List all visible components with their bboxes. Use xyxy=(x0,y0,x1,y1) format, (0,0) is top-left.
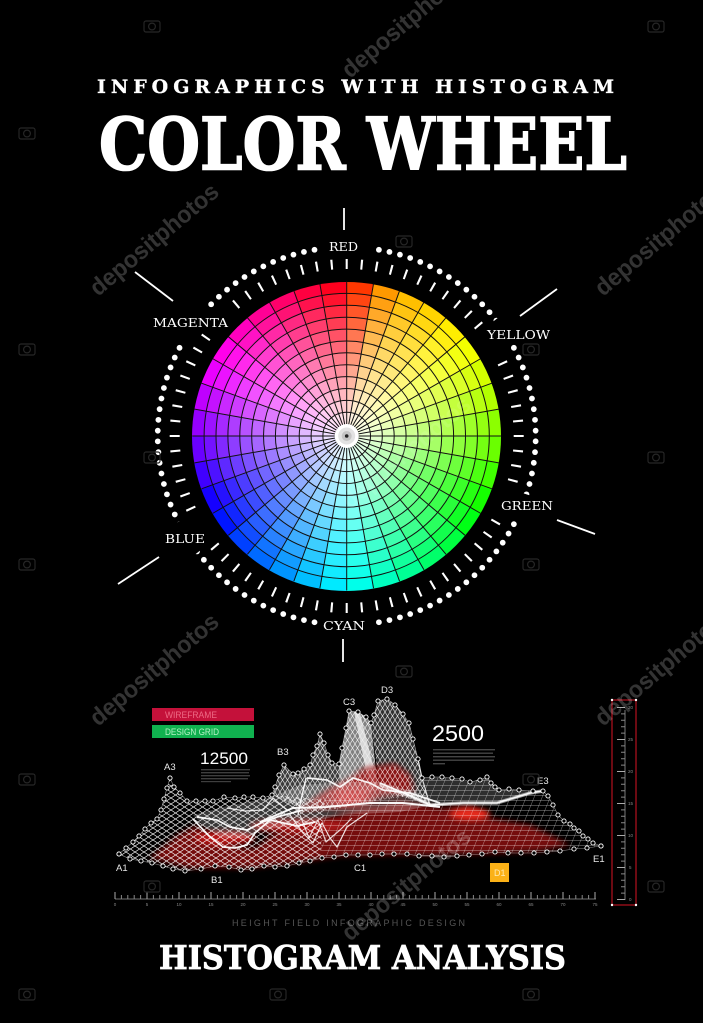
vertical scale: 30 xyxy=(628,705,634,710)
horizontal scale: 45 xyxy=(400,902,406,907)
vertical scale: 5 xyxy=(629,865,632,870)
point labels: D3 xyxy=(381,685,393,696)
color wheel fill xyxy=(192,282,501,590)
D1 marker: D1 xyxy=(494,868,506,878)
horizontal scale: 55 xyxy=(464,902,470,907)
horizontal scale: 65 xyxy=(528,902,534,907)
peak D3 xyxy=(371,699,430,805)
point labels: E1 xyxy=(593,854,605,865)
peak C3 xyxy=(339,711,378,800)
point labels: C3 xyxy=(343,697,355,708)
horizontal scale: 0 xyxy=(114,902,117,907)
vertical scale: 20 xyxy=(628,769,634,774)
D1 marker xyxy=(490,863,509,882)
watermark text: depositphotos xyxy=(85,178,224,302)
point labels: B3 xyxy=(277,747,289,758)
caption: HEIGHT FIELD INFOGRAPHIC DESIGN xyxy=(232,918,465,928)
horizontal scale: 70 xyxy=(560,902,566,907)
tick ring xyxy=(175,264,519,608)
stat 12500: 12500 xyxy=(200,749,248,768)
point labels: C1 xyxy=(354,863,366,874)
outline nodes front edge xyxy=(119,846,601,871)
vertical scale: 25 xyxy=(628,737,634,742)
dotted ring xyxy=(158,247,536,625)
wheel colour labels: RED xyxy=(329,239,358,254)
point labels: E3 xyxy=(537,776,549,787)
white ridge lines xyxy=(193,759,543,848)
wheel grid lines xyxy=(192,282,501,590)
vertical scale: 15 xyxy=(628,801,634,806)
wheel colour labels: BLUE xyxy=(165,531,205,546)
wheel colour labels xyxy=(153,239,553,633)
outline nodes back edge xyxy=(119,699,601,854)
vertical scale xyxy=(611,699,637,906)
stat 2500: 2500 xyxy=(432,721,484,746)
pale mesh band behind the ridges xyxy=(193,782,432,838)
stat 2500 xyxy=(432,721,495,764)
left floor mesh xyxy=(119,778,325,871)
watermark text: depositphotos xyxy=(337,391,476,515)
right floor mesh xyxy=(320,777,601,858)
legend: DESIGN GRID xyxy=(165,727,219,737)
pointer lines xyxy=(118,208,595,662)
wheel colour labels: YELLOW xyxy=(486,327,550,342)
wheel colour labels: CYAN xyxy=(323,618,365,633)
heading: infographics with histogram: INFOGRAPHICS WITH HISTOGRAM xyxy=(97,76,614,98)
horizontal scale xyxy=(114,896,598,907)
point labels xyxy=(116,685,605,886)
vertical scale: 0 xyxy=(629,897,632,902)
horizontal scale: 50 xyxy=(432,902,438,907)
horizontal scale: 75 xyxy=(592,902,598,907)
wireframe height field xyxy=(119,699,601,871)
vertical scale: 10 xyxy=(628,833,634,838)
horizontal scale: 25 xyxy=(272,902,278,907)
point labels: B1 xyxy=(211,875,223,886)
horizontal scale: 35 xyxy=(336,902,342,907)
horizontal scale: 15 xyxy=(208,902,214,907)
horizontal scale: 60 xyxy=(496,902,502,907)
horizontal scale: 30 xyxy=(304,902,310,907)
wheel hub xyxy=(335,424,359,448)
point labels: A1 xyxy=(116,863,128,874)
horizontal scale: 10 xyxy=(176,902,182,907)
legend: WIREFRAME xyxy=(165,710,217,720)
footer title: HISTOGRAM ANALYSIS xyxy=(159,938,566,977)
stat 12500 xyxy=(200,749,250,782)
grey back terrain xyxy=(422,777,543,805)
horizontal scale: 40 xyxy=(368,902,374,907)
peak B3 xyxy=(272,734,345,808)
watermark text: depositphotos xyxy=(85,608,224,732)
watermark text: depositphotos xyxy=(337,823,476,947)
wheel colour labels: MAGENTA xyxy=(153,315,229,330)
legend xyxy=(152,708,254,738)
horizontal scale: 5 xyxy=(146,902,149,907)
wheel colour labels: GREEN xyxy=(501,498,553,513)
point labels: A3 xyxy=(164,762,176,773)
horizontal scale: 20 xyxy=(240,902,246,907)
red field xyxy=(150,764,570,868)
